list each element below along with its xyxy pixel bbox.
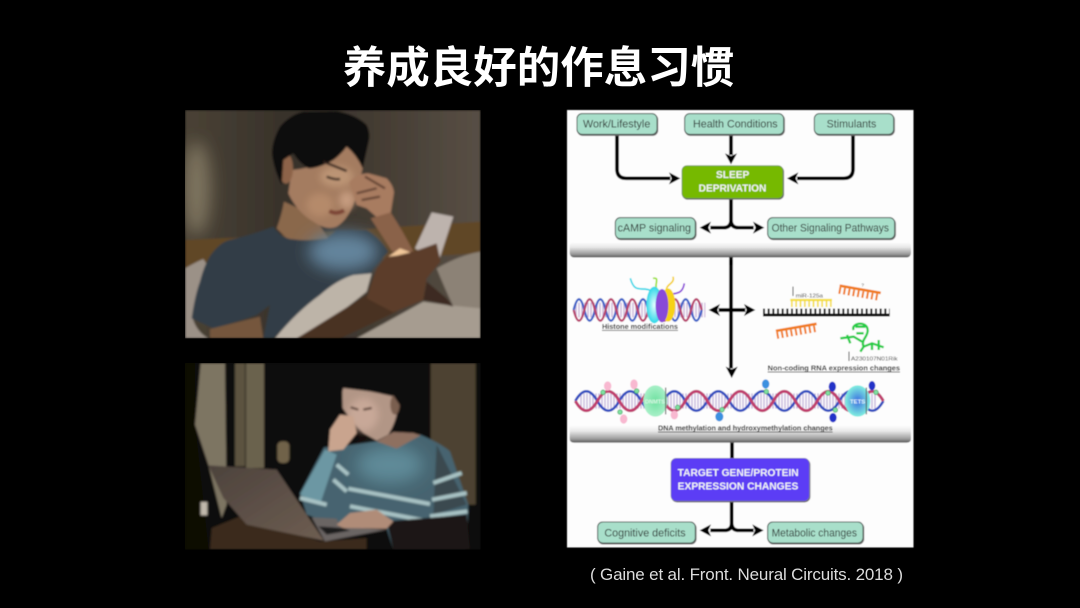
photo: woman rubbing eye at laptop in dark room <box>185 363 481 550</box>
box: Cognitive deficits: Cognitive deficits <box>604 527 686 539</box>
box: cAMP signaling <box>615 218 695 239</box>
box: other signaling pathways <box>768 218 895 239</box>
DNA methylation strand <box>575 379 883 424</box>
box: Metabolic changes <box>768 522 863 543</box>
DNA methylation strand: DNMTS <box>645 399 665 405</box>
non-coding RNA: A230107N01Rik <box>851 356 898 362</box>
panel: sleep deprivation pathway diagram <box>567 110 914 548</box>
box: target gene/protein expression changes <box>671 458 809 501</box>
box: Health Conditions: Health Conditions <box>693 119 778 131</box>
non-coding RNA: ? <box>861 283 864 288</box>
DNA methylation strand: TETS <box>850 399 866 405</box>
title: 养成良好的作息习惯 <box>343 45 734 93</box>
box: sleep deprivation: SLEEP <box>716 170 750 181</box>
box: Stimulants: Stimulants <box>827 119 876 131</box>
label: Non-coding RNA expression changes: Non-coding RNA expression changes <box>768 366 900 373</box>
box: Cognitive deficits <box>598 522 695 543</box>
citation: ( Gaine et al. Front. Neural Circuits. 2018 ) <box>590 565 903 584</box>
upper pathway: causes to signaling <box>570 114 911 265</box>
box: Work/Lifestyle <box>577 114 657 134</box>
divider band <box>570 242 911 257</box>
box: other signaling pathways: Other Signaling Pathways <box>772 223 889 235</box>
box: Metabolic changes: Metabolic changes <box>772 527 857 539</box>
box: target gene/protein expression changes: EXPRESSION CHANGES <box>678 481 798 492</box>
epigenetic mechanisms <box>574 260 900 378</box>
label: DNA methylation and hydroxymethylation changes: DNA methylation and hydroxymethylation changes <box>658 426 833 433</box>
box: Stimulants <box>814 114 894 134</box>
box: cAMP signaling: cAMP signaling <box>618 223 691 235</box>
box: sleep deprivation: DEPRIVATION <box>699 183 766 194</box>
box: sleep deprivation <box>682 166 783 198</box>
non-coding RNA: miR-125a <box>796 293 824 299</box>
divider band <box>570 425 911 443</box>
box: Health Conditions <box>685 114 784 134</box>
photo: man rubbing eyes while using phone in bed <box>183 110 481 338</box>
box: target gene/protein expression changes: TARGET GENE/PROTEIN <box>678 468 799 479</box>
lower pathway: methylation to outcomes <box>570 379 911 543</box>
DNA with histone <box>574 277 705 323</box>
box: Work/Lifestyle: Work/Lifestyle <box>583 119 650 131</box>
non-coding RNA <box>763 283 898 362</box>
label: Histone modifications: Histone modifications <box>602 324 678 331</box>
